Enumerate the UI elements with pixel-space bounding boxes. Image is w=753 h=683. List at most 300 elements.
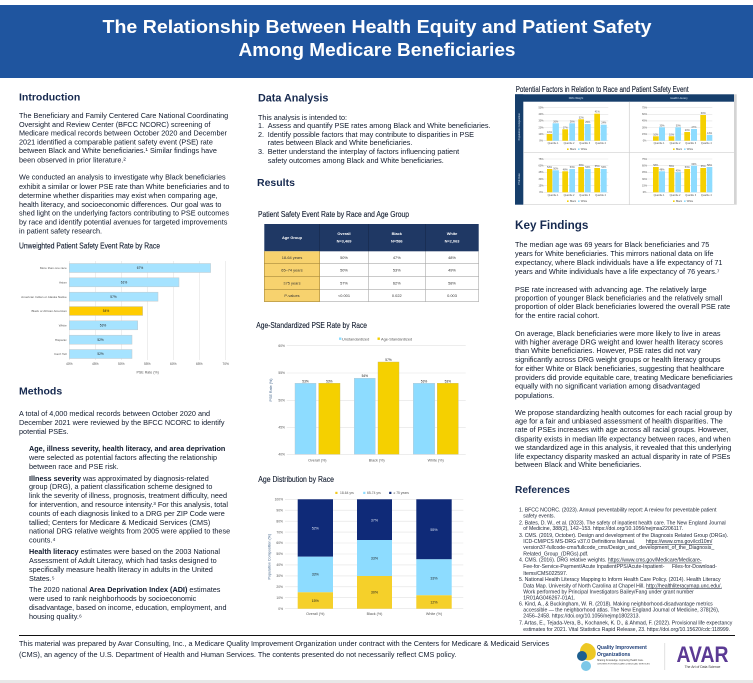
- text block: introduction: We conducted an analysis to investigate why Black beneficiaries: [19, 172, 226, 182]
- grouped bar chart: age-standardized PSE rate: Overall (%): [308, 458, 327, 462]
- table: PSE rate by race and age group: P-values: [284, 293, 300, 298]
- text block: data analysis aims: Assess and quantify PSE rates among Black and White beneficiaries.: [268, 121, 491, 130]
- grouped bar chart: age-standardized PSE rate: 53%: [302, 380, 309, 384]
- subchart: health literacy, population composition: [642, 106, 713, 151]
- horizontal bar chart: PSE rate by race: 60%: [170, 362, 177, 366]
- text block: data analysis aims: 1.: [258, 121, 264, 130]
- subchart: health literacy, population composition: Quartile 3: [685, 142, 697, 145]
- panel chart: potential factors: [515, 94, 737, 205]
- text block: key findings: proportion of older Black beneficiaries lowered the overall PSE rate: [515, 302, 730, 311]
- text block: references: 7. Artas, E., Tejada-Vera, B., Kochanek, K. D., & Ahmad, F. (2022). Provisional life expectancy: [519, 621, 733, 627]
- text block: references: 3. CMS. (2019, October). Design and development of the Diagnosis Related Group (DRGs).: [519, 533, 728, 539]
- subchart: health literacy, population composition: Black: [676, 148, 683, 151]
- grouped bar chart: age-standardized PSE rate: [269, 336, 466, 462]
- horizontal bar chart: PSE rate by race: 55%: [144, 362, 151, 366]
- text block: references: accessible — the neighborhood atlas. The New England Journal of Medicine, 378(26),: [523, 608, 719, 614]
- horizontal bar chart: PSE rate by race: American Indian or Alaska Native: [21, 295, 67, 299]
- heading: Data Analysis: Data Analysis: [258, 93, 328, 105]
- panel chart: potential factors: PSE Rate: [517, 173, 521, 185]
- grouped bar chart: age-standardized PSE rate: 57%: [385, 358, 392, 362]
- text block: methods: potential PSEs.: [19, 427, 69, 436]
- text block: key findings: years and White individuals have a life expectancy of 76 years.⁷: [515, 267, 720, 276]
- heading: References: References: [515, 485, 570, 496]
- horizontal bar chart: PSE rate by race: 52%: [97, 352, 104, 356]
- text block: references: ICD-CM/PCS MS-DRG v37.0 Definitions Manual.: [523, 539, 635, 545]
- text block: methods: A total of 4,000 medical records between October 2020 and: [19, 409, 210, 418]
- subchart: health literacy, population composition: 30%: [676, 124, 681, 127]
- subchart: health literacy, PSE rate: 45%: [676, 170, 681, 172]
- text block: methods: were used to rank neighborhoods by socioeconomic: [28, 594, 197, 603]
- text block: introduction: Oversight and Review Center (BFCC NCORC) screening of: [19, 120, 211, 129]
- grouped bar chart: age-standardized PSE rate: Black (%): [369, 458, 385, 462]
- grouped bar chart: age-standardized PSE rate: 53%: [421, 380, 427, 384]
- table: PSE rate by race and age group: 53%: [393, 268, 401, 272]
- subchart: health literacy, PSE rate: Quartile 4: [701, 194, 712, 197]
- text block: methods: housing quality.⁶: [29, 612, 82, 621]
- table: PSE rate by race and age group: 47%: [393, 255, 401, 260]
- title banner: [0, 5, 753, 78]
- text block: references: Fee-for-Service-Payment/Acute InpatientPPS/Acute-Inpatient-: [523, 564, 665, 570]
- horizontal bar chart: PSE rate by race: Asian: [59, 280, 67, 284]
- text block: data analysis aims: [258, 113, 491, 165]
- subchart: DRG weight, population composition: Quartile 1: [548, 142, 559, 145]
- subchart: DRG weight, PSE rate: 53%: [601, 166, 607, 169]
- horizontal bar chart: PSE rate by race: 70%: [222, 362, 229, 366]
- stacked bar chart: age distribution by race: 52%: [312, 526, 320, 530]
- logo: AVAR: The Art of Data Science: [685, 665, 721, 669]
- stacked bar chart: age distribution by race: 40%: [276, 563, 283, 567]
- stacked bar chart: age distribution by race: [267, 491, 463, 616]
- stacked bar chart: age distribution by race: 0%: [278, 607, 283, 611]
- table: PSE rate by race and age group: ≥75 years: [283, 280, 301, 286]
- subchart: health literacy, population composition: 15%: [642, 133, 648, 136]
- subchart: DRG weight, PSE rate: Quartile 2: [564, 194, 575, 197]
- text block: data analysis aims: Better understand the interplay of factors influencing patient: [268, 147, 459, 156]
- subchart: DRG weight, PSE rate: 53%: [547, 166, 553, 169]
- stacked bar chart: age distribution by race: White (%): [426, 612, 442, 616]
- text block: introduction: been observed in prior literature.²: [19, 156, 126, 164]
- subchart: DRG weight, PSE rate: [538, 158, 608, 203]
- horizontal bar chart: PSE rate by race: 50%: [118, 362, 125, 366]
- panel chart: potential factors: Population Composition: [517, 112, 521, 140]
- subchart: DRG weight, population composition: 50%: [538, 106, 544, 110]
- table: PSE rate by race and age group: N=3,469: [337, 238, 352, 244]
- table: PSE rate by race and age group: N=2,063: [445, 238, 460, 244]
- subchart: health literacy, population composition: 27%: [691, 126, 697, 129]
- table: PSE rate by race and age group: Overall: [337, 231, 351, 236]
- text block: key findings: than White beneficiaries. However, PSE rates did not vary: [515, 346, 701, 355]
- logo: Quality Improvement Organizations: Sharing Knowledge. Improving Health Care.: [597, 659, 644, 662]
- text block: data analysis aims: Identify possible factors that may contribute to disparities in PSE: [268, 130, 474, 139]
- heading: Methods: Methods: [19, 386, 62, 398]
- subchart: DRG weight, population composition: 0%: [539, 140, 544, 142]
- subchart: DRG weight, population composition: White: [581, 148, 588, 151]
- text block: key findings: we standardized age in this analysis, it revealed that this underlying: [514, 443, 731, 452]
- subchart: DRG weight, PSE rate: 75%: [538, 158, 544, 161]
- text block: key findings: years for White beneficiaries. This mirrors national data on life: [515, 249, 714, 258]
- horizontal bar chart: PSE rate by race: Can't Tell: [54, 352, 67, 356]
- table: PSE rate by race and age group: 48%: [448, 255, 456, 260]
- stacked bar chart: age distribution by race: 20%: [276, 585, 283, 589]
- text block: methods: [19, 409, 230, 621]
- subchart: health literacy, PSE rate: 55%: [669, 165, 675, 168]
- subchart: DRG weight, population composition: 41%: [595, 111, 600, 114]
- subchart: DRG weight, PSE rate: 53%: [585, 166, 591, 169]
- subchart: health literacy, PSE rate: [642, 158, 713, 203]
- text block: methods: for intervention, and resource intensity.³ For this analysis, total: [29, 500, 228, 509]
- text block: introduction: exhibit a similar or lower PSE rate than White beneficiaries and to: [19, 182, 229, 191]
- text block: references: estimates for 2021. Vital Statistics Rapid Release, 23. https://doi.org/10.15620/cdc:118999.: [523, 627, 730, 633]
- subchart: health literacy, population composition: 60%: [701, 112, 706, 115]
- subchart: health literacy, PSE rate: Black: [676, 200, 683, 203]
- heading: unweighted chart: Unweighted Patient Safety Event Rate by Race: [19, 242, 160, 250]
- stacked bar chart: age distribution by race: 65-74 yrs: [367, 491, 381, 495]
- stacked bar chart: age distribution by race: 33%: [430, 576, 438, 580]
- subchart: DRG weight, PSE rate: Black: [570, 200, 577, 203]
- text block: key findings: between Black and White beneficiaries.: [515, 460, 642, 469]
- subchart: DRG weight, PSE rate: 60%: [538, 164, 544, 168]
- text block: references: 2456–2458. https://doi.org/10.1056/nejmp1802313.: [523, 614, 640, 620]
- table: PSE rate by race and age group: [264, 224, 479, 302]
- subchart: DRG weight, population composition: 17%: [563, 126, 568, 129]
- text block: methods: States.⁵: [29, 574, 55, 583]
- text block: references: Files-for-Download-: [672, 564, 717, 570]
- text block: key findings: [514, 240, 733, 469]
- subchart: DRG weight, population composition: 30%: [538, 120, 544, 123]
- text block: key findings: significantly across DRG weight groups or health literacy groups: [515, 355, 721, 364]
- text block: methods: between race and PSE risk.: [29, 462, 118, 471]
- subchart: DRG weight, population composition: 24%: [601, 122, 607, 125]
- horizontal bar chart: PSE rate by race: 67%: [137, 266, 143, 270]
- text block: data analysis aims: This analysis is intended to:: [258, 113, 347, 122]
- text block: references: version37-fullcode-cms/fullcode_cms/Design_and_development_of_the_Diagnosis_: [523, 545, 714, 551]
- text block: introduction: shed light on the underlying factors contributing to PSE outcomes: [19, 208, 229, 218]
- text block: references: 6. Kind, A., & Buckingham, W. R. (2018). Making neighborhood-disadvantage metrics: [519, 602, 713, 608]
- table: PSE rate by race and age group: 62%: [393, 280, 401, 286]
- subchart: DRG weight, population composition: 20%: [538, 126, 544, 129]
- horizontal bar chart: PSE rate by race: Black or African American: [31, 309, 67, 313]
- subchart: health literacy, population composition: 10%: [669, 133, 675, 136]
- stacked bar chart: age distribution by race: Black (%): [367, 612, 382, 616]
- stacked bar chart: age distribution by race: Overall (%): [306, 612, 325, 616]
- subchart: DRG weight, population composition: [538, 106, 608, 151]
- grouped bar chart: age-standardized PSE rate: 50%: [278, 398, 285, 402]
- grouped bar chart: age-standardized PSE rate: 53%: [326, 380, 333, 384]
- horizontal bar chart: PSE rate by race: 54%: [103, 309, 109, 313]
- text block: methods: Illness severity was approximated by diagnosis-related: [29, 474, 209, 483]
- text block: data analysis aims: safety outcomes among Black and White beneficiaries.: [268, 156, 444, 165]
- subchart: DRG weight, PSE rate: Quartile 1: [548, 194, 559, 197]
- text block: references: 4. CMS. (2016). DRG relative weights. https://www.cms.gov/Medicare/Medicare-: [519, 558, 702, 564]
- footer disclaimer: This material was prepared by Avar Consulting, Inc., a Medicare Quality Improvement Organization under contract with the Centers for Medicare & Medicaid Services: [19, 639, 550, 648]
- subchart: health literacy, PSE rate: Quartile 3: [685, 194, 697, 197]
- grouped bar chart: age-standardized PSE rate: White (%): [428, 458, 444, 462]
- subchart: DRG weight, population composition: 40%: [538, 113, 544, 116]
- logo: Quality Improvement Organizations: CENTERS FOR MEDICARE & MEDICAID SERVICES: [597, 662, 650, 666]
- grouped bar chart: age-standardized PSE rate: Age-Standardized: [381, 336, 412, 341]
- stacked bar chart: age distribution by race: 12%: [430, 601, 438, 605]
- grouped bar chart: age-standardized PSE rate: 45%: [278, 426, 285, 430]
- text block: methods: specifically measure health literacy in adults in the United: [29, 565, 213, 574]
- text block: methods: tallied; Centers for Medicare & Medicaid Services (CMS): [29, 518, 210, 527]
- subchart: health literacy, PSE rate: 45%: [642, 171, 648, 174]
- text block: key findings: disparity exists in median life expectancy between races, and when: [515, 434, 731, 444]
- subchart: health literacy, PSE rate: 58%: [707, 164, 713, 167]
- horizontal bar chart: PSE rate by race: 57%: [110, 295, 117, 299]
- title banner: The Relationship Between Health Equity and Patient Safety: [102, 17, 652, 37]
- text block: key findings: The median age was 69 years for Black beneficiaries and 75: [515, 240, 709, 249]
- table: PSE rate by race and age group: Black: [392, 231, 403, 236]
- horizontal bar chart: PSE rate by race: 52%: [97, 338, 104, 342]
- subchart: health literacy, PSE rate: 0%: [643, 191, 647, 194]
- text block: introduction: health literacy, and socioeconomic differences. Our goal was to: [19, 200, 221, 209]
- title banner: Among Medicare Beneficiaries: [238, 40, 516, 60]
- subchart: DRG weight, PSE rate: 30%: [538, 178, 544, 181]
- text block: introduction: between Black and White beneficiaries.¹ Similar findings have: [19, 146, 217, 155]
- subchart: DRG weight, PSE rate: 58%: [579, 164, 584, 167]
- grouped bar chart: age-standardized PSE rate: Unstandardized: [342, 336, 369, 341]
- text block: methods: The 2020 national Area Deprivation Index (ADI) estimates: [29, 585, 221, 594]
- logo: Quality Improvement Organizations: Organizations: [597, 652, 631, 658]
- text block: key findings: for either White or Black beneficiaries, suggesting that healthcare: [515, 364, 724, 373]
- stacked bar chart: age distribution by race: 33%: [371, 556, 379, 560]
- text block: references: 1. BFCC NCORC. (2023). Annual preventability report: A review for preventable patient: [519, 508, 717, 514]
- text block: key findings: We propose standardizing health outcomes for each racial group by: [515, 408, 732, 417]
- stacked bar chart: age distribution by race: 55%: [430, 528, 438, 532]
- text block: references: https://www.cms.gov/icd10m/: [646, 539, 713, 545]
- text block: references: safety events.: [523, 514, 555, 520]
- subchart: health literacy, PSE rate: 55%: [701, 165, 706, 168]
- subchart: health literacy, population composition: 13%: [707, 132, 713, 135]
- stacked bar chart: age distribution by race: 90%: [276, 508, 283, 512]
- subchart: DRG weight, PSE rate: White: [581, 200, 588, 203]
- table: PSE rate by race and age group: 58%: [448, 280, 456, 286]
- text block: key findings: PSE rate increased with advancing age. The relatively large: [515, 285, 707, 294]
- text block: introduction: by race and identify potential avenues for targeted improvements: [19, 218, 228, 226]
- subchart: DRG weight, population composition: 26%: [553, 120, 559, 123]
- table: PSE rate by race and age group: 65–74 years: [281, 268, 303, 272]
- text block: references: Data Map. University of North Carolina at Chapel Hill. http://healthliteracymap.unc.edu/.: [523, 583, 722, 589]
- subchart: DRG weight, PSE rate: Quartile 3: [579, 194, 591, 197]
- horizontal bar chart: PSE rate by race: [21, 261, 229, 374]
- text block: references: 2. Bates, D. W., et al. (2023). The safety of inpatient health care. The New England Journal: [519, 521, 726, 527]
- text block: key findings: equally with no significant variation among disadvantaged: [515, 382, 700, 390]
- text block: references: 5. National Health Literacy Mapping to Inform Health Care Policy. (2014). Health Literacy: [519, 577, 721, 583]
- footer disclaimer: [19, 639, 550, 659]
- subchart: DRG weight, PSE rate: Quartile 4: [595, 194, 607, 197]
- text block: methods: Assessment of Adult Literacy, which had tasks designed to: [29, 556, 217, 565]
- text block: key findings: life expectancy disparity masked an actual disparity in rate of PSEs: [515, 452, 731, 461]
- text block: introduction: 2021 identified a comparable patient safety event (PSE) rate: [19, 138, 213, 146]
- stacked bar chart: age distribution by race: 18-64 yrs: [340, 491, 354, 495]
- grouped bar chart: age-standardized PSE rate: 40%: [278, 452, 285, 456]
- table: PSE rate by race and age group: <0.001: [338, 293, 350, 298]
- horizontal bar chart: PSE rate by race: More than one race: [40, 266, 67, 270]
- horizontal bar chart: PSE rate by race: White: [59, 324, 67, 328]
- heading: age distribution chart: Age Distribution by Race: [258, 475, 334, 484]
- text block: introduction: Medicare medical records between October 2020 and December: [19, 128, 228, 138]
- subchart: DRG weight, PSE rate: 55%: [595, 165, 600, 168]
- stacked bar chart: age distribution by race: 33%: [312, 573, 320, 577]
- subchart: health literacy, PSE rate: 15%: [642, 184, 648, 188]
- text block: references: Items/CMS022597.: [523, 571, 567, 577]
- subchart: health literacy, PSE rate: White: [687, 200, 694, 203]
- stacked bar chart: age distribution by race: Population Composition (%): [267, 534, 271, 580]
- text block: data analysis aims: 3.: [258, 147, 264, 156]
- subchart: health literacy, PSE rate: 60%: [691, 163, 697, 166]
- subchart: health literacy, population composition: Quartile 1: [654, 142, 665, 145]
- text block: key findings: providers did provide equitable care, treating Medicare beneficiaries: [515, 373, 733, 382]
- horizontal bar chart: PSE rate by race: PSE Rate (%): [137, 370, 159, 374]
- logo: Quality Improvement Organizations: [577, 643, 650, 671]
- text block: introduction: The Beneficiary and Family Centered Care National Coordinating: [19, 111, 228, 120]
- heading: potential factors: Potential Factors in Relation to Race and Patient Safety Event: [516, 85, 689, 94]
- text block: methods: link the severity of illness, prognosis, treatment difficulty, need: [29, 491, 227, 500]
- text block: data analysis aims: rates between Black and White beneficiaries.: [268, 138, 412, 147]
- stacked bar chart: age distribution by race: 10%: [276, 596, 283, 600]
- table: PSE rate by race and age group: White: [447, 231, 458, 236]
- subchart: DRG weight, population composition: 32%: [579, 116, 584, 119]
- stacked bar chart: age distribution by race: 80%: [276, 519, 283, 523]
- subchart: health literacy, population composition: 75%: [642, 106, 648, 110]
- stacked bar chart: age distribution by race: 60%: [276, 541, 283, 545]
- stacked bar chart: age distribution by race: 30%: [276, 574, 283, 578]
- subchart: health literacy, PSE rate: 30%: [642, 178, 648, 181]
- stacked bar chart: age distribution by race: 30%: [371, 591, 379, 595]
- subchart: DRG weight, population composition: 25%: [585, 121, 591, 124]
- subchart: health literacy, PSE rate: Quartile 2: [670, 194, 681, 197]
- panel chart: potential factors: Health Literacy: [670, 96, 688, 100]
- subchart: DRG weight, population composition: 10%: [538, 133, 544, 136]
- subchart: health literacy, population composition: White: [687, 148, 694, 151]
- subchart: health literacy, PSE rate: 60%: [642, 164, 648, 168]
- table: PSE rate by race and age group: Age Group: [282, 235, 303, 240]
- table: PSE rate by race and age group: 0.022: [392, 293, 402, 298]
- stacked bar chart: age distribution by race: 100%: [275, 498, 283, 502]
- horizontal bar chart: PSE rate by race: Hispanic: [55, 338, 67, 342]
- text block: introduction: in patient safety research.: [19, 226, 102, 236]
- subchart: DRG weight, population composition: 10%: [547, 131, 553, 134]
- subchart: health literacy, PSE rate: 58%: [653, 164, 659, 167]
- text block: key findings: rate of PSEs increases with age across all racial groups. However,: [515, 425, 728, 434]
- subchart: health literacy, PSE rate: 53%: [685, 166, 690, 169]
- text block: methods: Age, illness severity, health literacy, and area deprivation: [29, 444, 225, 453]
- subchart: DRG weight, population composition: 26%: [570, 120, 575, 123]
- subchart: DRG weight, PSE rate: 0%: [539, 191, 544, 194]
- logo: AVAR: AVAR: [676, 642, 729, 667]
- table: PSE rate by race and age group: 0.003: [447, 293, 457, 298]
- subchart: health literacy, population composition: 20%: [685, 129, 690, 132]
- panel chart: potential factors: DRG Weight: [569, 96, 584, 100]
- grouped bar chart: age-standardized PSE rate: 60%: [278, 344, 285, 348]
- stacked bar chart: age distribution by race: 70%: [276, 530, 283, 534]
- subchart: DRG weight, PSE rate: 50%: [553, 168, 559, 170]
- subchart: DRG weight, PSE rate: 48%: [563, 168, 568, 172]
- subchart: health literacy, population composition: 0%: [643, 140, 647, 142]
- text block: key findings: with higher average DRG weight and lower health literacy scores: [514, 338, 723, 346]
- horizontal bar chart: PSE rate by race: 65%: [196, 362, 203, 366]
- heading: table: Patient Safety Event Rate by Race and Age Group: [258, 210, 409, 219]
- table: PSE rate by race and age group: 49%: [448, 268, 456, 272]
- subchart: health literacy, population composition: Quartile 4: [701, 142, 712, 145]
- table: PSE rate by race and age group: N=586: [391, 238, 403, 244]
- stacked bar chart: age distribution by race: 37%: [371, 518, 379, 522]
- heading: Results: Results: [257, 177, 295, 189]
- stacked bar chart: age distribution by race: 50%: [276, 552, 283, 556]
- horizontal bar chart: PSE rate by race: 61%: [121, 280, 127, 284]
- text block: introduction: [19, 111, 229, 236]
- text block: data analysis aims: 2.: [258, 130, 264, 139]
- text block: introduction: determine whether disparities may exist when comparing age,: [19, 191, 218, 200]
- subchart: health literacy, population composition: Quartile 2: [670, 142, 681, 145]
- text block: key findings: expectancy, where Black individuals have a life expectancy of 71: [515, 258, 722, 267]
- footer disclaimer: (CMS), an agency of the U.S. Department of Health and Human Services. The contents presented do not necessarily reflect CMS policy.: [19, 650, 456, 659]
- subchart: DRG weight, population composition: Quartile 2: [564, 142, 575, 145]
- text block: methods: were selected as potential factors affecting the relationship: [28, 453, 217, 462]
- text block: references: [519, 508, 733, 633]
- text block: key findings: On average, Black beneficiaries were more likely to live in areas: [515, 329, 721, 338]
- subchart: health literacy, population composition: 30%: [642, 126, 648, 129]
- text block: key findings: age for a fair and unbiased assessment of health disparities. The: [515, 416, 723, 426]
- subchart: DRG weight, PSE rate: 15%: [538, 184, 544, 188]
- table: PSE rate by race and age group: 50%: [340, 255, 348, 260]
- text block: methods: group (DRG), a patient classification scheme designed to: [29, 482, 212, 491]
- text block: methods: national DRG relative weights from 2005 were applied to these: [29, 526, 230, 536]
- footer rule: [19, 635, 735, 636]
- text block: methods: Health literacy estimates were based on the 2003 National: [29, 547, 220, 556]
- table: PSE rate by race and age group: 57%: [340, 280, 348, 286]
- bottom edge: [0, 680, 753, 683]
- heading: age-standardized chart: Age-Standardized PSE Rate by Race: [256, 321, 367, 330]
- subchart: health literacy, population composition: 30%: [659, 124, 665, 127]
- subchart: DRG weight, population composition: Quartile 3: [579, 142, 591, 145]
- grouped bar chart: age-standardized PSE rate: 53%: [445, 380, 451, 384]
- text block: methods: disadvantage, based on income, education, employment, and: [29, 603, 226, 612]
- heading: Introduction: Introduction: [19, 92, 80, 104]
- text block: methods: December 2021 were reviewed by the BFCC NCORC to identify: [19, 418, 225, 427]
- horizontal bar chart: PSE rate by race: 53%: [100, 324, 106, 328]
- subchart: DRG weight, population composition: Black: [570, 148, 577, 151]
- subchart: health literacy, PSE rate: 75%: [642, 158, 648, 161]
- heading: Key Findings: Key Findings: [515, 219, 589, 232]
- stacked bar chart: age distribution by race: ≥ 75 years: [394, 491, 409, 495]
- text block: references: Related_Group_(DRGs).pdf.: [523, 551, 588, 557]
- text block: key findings: populations.: [515, 391, 554, 400]
- grouped bar chart: age-standardized PSE rate: 55%: [278, 371, 285, 375]
- table: PSE rate by race and age group: 18-64 years: [282, 255, 302, 260]
- grouped bar chart: age-standardized PSE rate: 54%: [362, 374, 368, 378]
- text block: references: of Medicine, 388(2), 142–153. https://doi.org/10.1056/nejmsa2206117.: [523, 526, 683, 532]
- text block: key findings: for the entire racial cohort.: [515, 311, 599, 320]
- text block: key findings: proportion of younger Black beneficiaries and the relatively small: [515, 294, 723, 302]
- subchart: DRG weight, PSE rate: 45%: [538, 171, 544, 174]
- stacked bar chart: age distribution by race: 15%: [312, 599, 320, 603]
- grouped bar chart: age-standardized PSE rate: PSE Rate (%): [269, 379, 273, 401]
- subchart: health literacy, PSE rate: 48%: [659, 168, 665, 172]
- subchart: health literacy, PSE rate: Quartile 1: [654, 194, 665, 197]
- text block: methods: counts.⁴: [29, 536, 56, 544]
- text block: references: Work performed by Principal Investigators Bailey/Fang under grant number: [523, 590, 694, 596]
- logo: Quality Improvement Organizations: Quality Improvement: [597, 645, 647, 651]
- subchart: health literacy, population composition: 60%: [642, 113, 648, 116]
- text block: references: 1R01AG046267-01A1.: [523, 596, 575, 602]
- table: PSE rate by race and age group: 50%: [340, 268, 348, 272]
- subchart: health literacy, population composition: 10%: [653, 133, 659, 136]
- subchart: health literacy, population composition: 45%: [642, 120, 648, 123]
- horizontal bar chart: PSE rate by race: 45%: [92, 362, 99, 366]
- subchart: DRG weight, PSE rate: 53%: [570, 166, 575, 169]
- logo divider: [664, 643, 666, 670]
